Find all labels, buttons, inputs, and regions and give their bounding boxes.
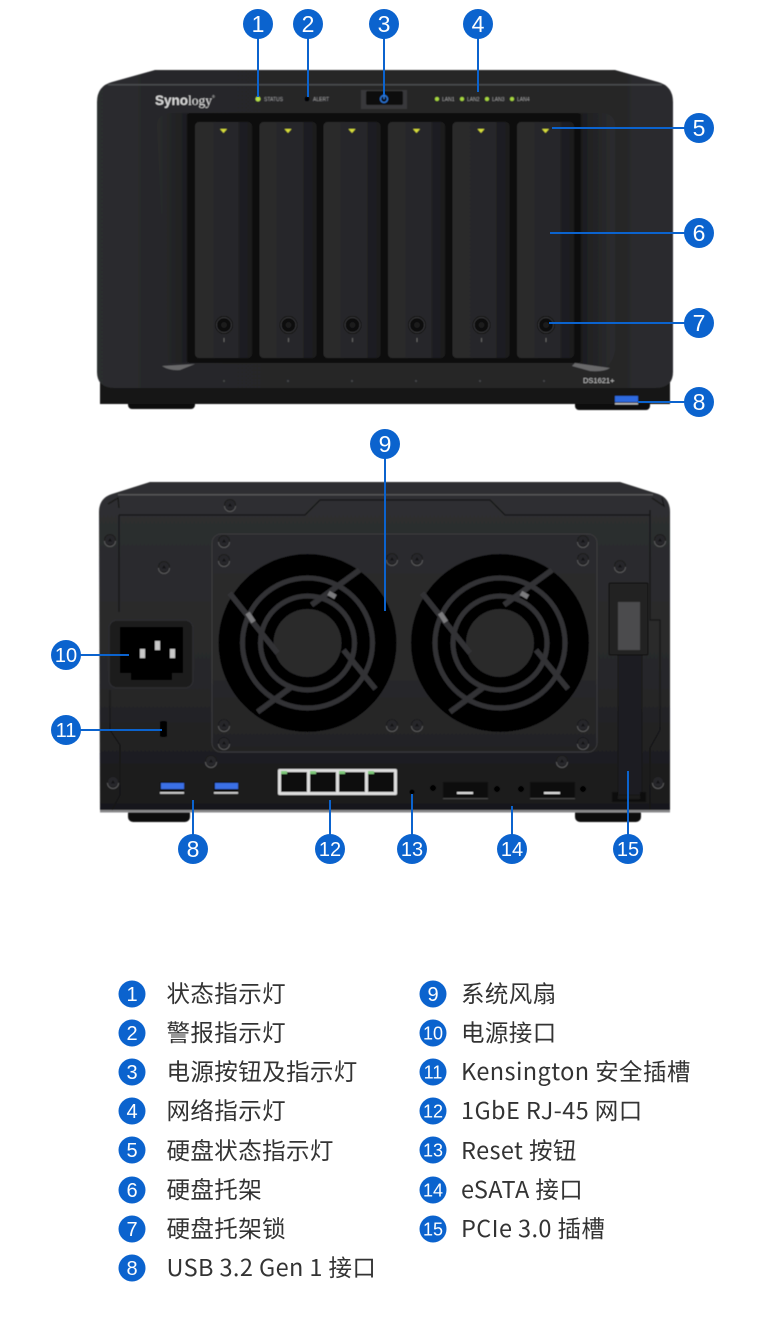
front USB port (615, 396, 638, 404)
feet (128, 808, 641, 822)
legend item 9: 系统风扇 (461, 975, 557, 1009)
legend item 10: 电源接口 (461, 1014, 557, 1048)
callout: 11 Kensington (51, 715, 162, 745)
callout: 2 alert: 2 (302, 11, 314, 37)
front view of NAS (97, 70, 673, 410)
left fan (218, 554, 396, 732)
callout: 3 power (369, 9, 399, 95)
chassis panel lines (108, 498, 664, 810)
legend item 4: 网络指示灯 (166, 1092, 286, 1126)
model label: DS1621+ (583, 376, 615, 385)
legend item 9: 9 (427, 984, 439, 1006)
LAN LEDs: LAN1 (442, 97, 455, 103)
status LEDs: ALERT (313, 97, 329, 103)
legend item 5: 硬盘状态指示灯 (166, 1132, 334, 1166)
legend item 15: 15 (423, 1220, 443, 1240)
rear USB ports (160, 782, 238, 794)
callout: 7 tray lock: 7 (693, 310, 705, 336)
callout: 13 reset: 13 (401, 839, 423, 861)
legend item 14: 14 (423, 1180, 443, 1200)
bottom edge (100, 810, 670, 812)
legend item 5: 5 (126, 1140, 138, 1162)
legend item 1: 1 (126, 984, 138, 1006)
legend item 11: 11 (424, 1062, 442, 1082)
callout: 2 alert (293, 9, 323, 97)
legend item 13: Reset 按钮 (461, 1132, 577, 1166)
callout: 15 PCIe: 15 (617, 839, 639, 861)
legend item 13: 13 (423, 1140, 443, 1160)
legend item 3: 电源按钮及指示灯 (166, 1053, 358, 1087)
top edge highlight (118, 494, 653, 496)
legend item 4: 4 (126, 1101, 138, 1123)
LAN LEDs (435, 97, 530, 103)
callout: 4 LAN: 4 (472, 11, 485, 37)
Synology logo: ® (212, 94, 215, 99)
lower base (100, 380, 670, 404)
reset hole (410, 790, 414, 794)
LAN LEDs: LAN3 (492, 97, 505, 103)
callout: 8 front USB (638, 387, 714, 417)
right fan (411, 554, 589, 732)
legend item 10 (420, 1014, 557, 1048)
callout: 8 front USB: 8 (693, 389, 705, 415)
callout: 1 status: 1 (252, 11, 264, 37)
callout: 14 eSATA (497, 806, 527, 864)
legend item 7: 7 (126, 1219, 138, 1241)
screws (104, 500, 666, 788)
legend item 14: eSATA 接口 (461, 1171, 583, 1205)
legend item 6: 6 (126, 1180, 138, 1202)
LAN ports (278, 769, 397, 795)
Synology logo: Synology (155, 93, 212, 108)
legend item 1: 状态指示灯 (166, 975, 286, 1009)
rear view of NAS (99, 482, 670, 822)
callout: 9 fan (370, 429, 400, 611)
PCIe slot (609, 583, 648, 802)
legend: right column (420, 975, 691, 1244)
legend item 12: 12 (423, 1102, 443, 1122)
drive bay recess (187, 113, 581, 363)
indicator dots (223, 380, 545, 382)
legend: left column (118, 975, 376, 1283)
power socket (109, 620, 193, 688)
callout: 12 LAN ports (315, 800, 345, 864)
LAN LEDs: LAN2 (467, 97, 480, 103)
callout: 1 status (243, 9, 273, 97)
legend item 6: 硬盘托架 (166, 1171, 262, 1205)
callout: 10 power socket (51, 640, 129, 670)
chassis face (97, 70, 673, 388)
callout: 15 PCIe (613, 771, 643, 864)
drive bay side frames (157, 113, 615, 371)
callout: 4 LAN (463, 9, 493, 92)
legend item 2: 警报指示灯 (166, 1014, 286, 1048)
legend item 6 (118, 1171, 262, 1205)
callout: 5 drive LED (552, 113, 714, 143)
legend item 3: 3 (126, 1062, 138, 1084)
legend item 2: 2 (126, 1023, 138, 1045)
callout: 8 rear USB: 8 (187, 836, 199, 862)
callout: 11 Kensington: 11 (56, 720, 76, 742)
legend item 10: 10 (423, 1024, 443, 1044)
legend item 7: 硬盘托架锁 (166, 1210, 286, 1244)
callout: 5 drive LED: 5 (693, 115, 705, 141)
status LEDs (256, 96, 329, 103)
legend item 9 (420, 975, 557, 1009)
feet (128, 400, 650, 410)
legend item 15: PCIe 3.0 插槽 (461, 1210, 605, 1244)
legend item 12: 1GbE RJ-45 网口 (461, 1092, 643, 1126)
fan panel (212, 534, 597, 752)
chassis rear (99, 482, 670, 810)
callout: 14 eSATA: 14 (501, 839, 523, 861)
top edge highlight (108, 84, 662, 86)
callout: 12 LAN ports: 12 (319, 839, 341, 861)
callout: 9 fan: 9 (379, 431, 391, 457)
legend item 11: Kensington 安全插槽 (461, 1053, 691, 1087)
drive trays (195, 122, 574, 358)
LAN LEDs: LAN4 (517, 97, 530, 103)
Kensington slot (160, 721, 167, 737)
status LEDs: STATUS (264, 97, 284, 103)
power button (361, 90, 407, 109)
callout: 8 rear USB (178, 800, 208, 864)
callout: 6 drive tray: 6 (693, 220, 705, 246)
legend item 8: USB 3.2 Gen 1 接口 (166, 1249, 376, 1283)
legend item 8: 8 (126, 1258, 138, 1280)
callout: 7 tray lock (549, 308, 714, 338)
callout: 6 drive tray (550, 218, 714, 248)
eSATA ports (430, 782, 586, 799)
callout: 3 power: 3 (378, 11, 390, 37)
callout: 10 power socket: 10 (55, 645, 77, 667)
callout: 13 reset (397, 794, 427, 864)
